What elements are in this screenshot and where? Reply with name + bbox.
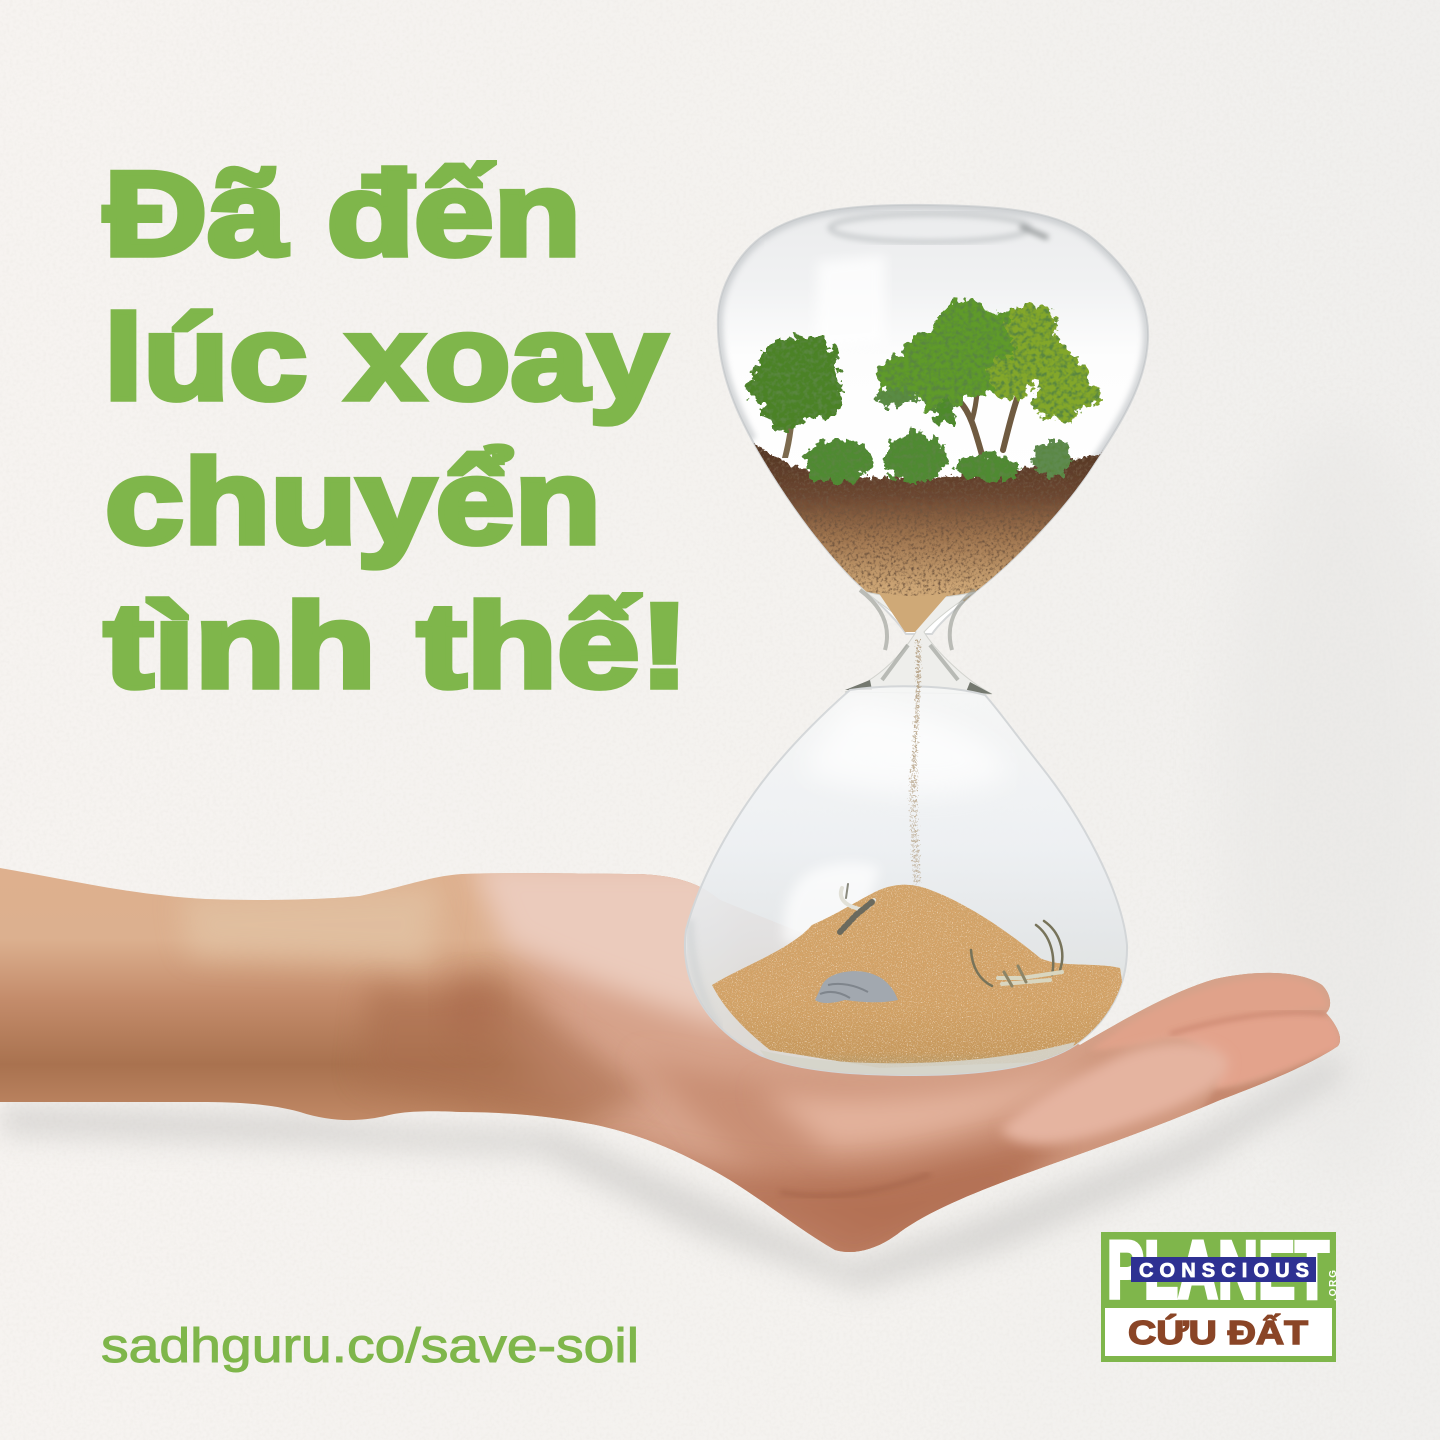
hourglass	[685, 205, 1148, 1078]
title	[104, 147, 689, 713]
shrubs	[804, 433, 1071, 483]
upper glass bulb	[718, 205, 1148, 634]
lower bulb highlights	[690, 700, 1010, 1030]
upper soil	[745, 438, 1112, 600]
title line 3: chuyển	[105, 435, 601, 569]
rib bones	[971, 921, 1062, 986]
hand shadow	[0, 1056, 1345, 1290]
CỨU ĐẤT: CỨU ĐẤT	[1128, 1314, 1308, 1351]
left tree	[747, 336, 843, 458]
title line 2: lúc xoay	[104, 291, 667, 425]
logo: Conscious Planet Cứu Đất	[1101, 1225, 1339, 1362]
.ORG vertical text: .ORG	[1328, 1270, 1339, 1301]
grey skull	[815, 971, 898, 1003]
lower sand mound	[712, 885, 1125, 1078]
glass rim reflections	[830, 214, 1048, 242]
title line 4: tình thế!	[104, 579, 689, 713]
falling sand stream	[913, 640, 919, 885]
website url: sadhguru.co/save-soil	[101, 1320, 639, 1373]
large twin tree	[873, 300, 1102, 455]
lower glass bulb	[685, 686, 1127, 1075]
logo green frame	[1101, 1232, 1336, 1362]
upper bulb soft rim shading	[718, 205, 1148, 470]
neck of hourglass	[845, 590, 992, 694]
palm base tone, blurred into the wrist	[518, 873, 1340, 1252]
CONSCIOUS bar: CONSCIOUS	[1139, 1260, 1309, 1282]
word PLANET: PLANET	[1107, 1225, 1329, 1316]
small bones on mound	[840, 884, 874, 932]
title line 1: Đã đến	[104, 147, 581, 281]
hand and forearm	[0, 868, 1340, 1252]
white lower box	[1105, 1308, 1332, 1356]
